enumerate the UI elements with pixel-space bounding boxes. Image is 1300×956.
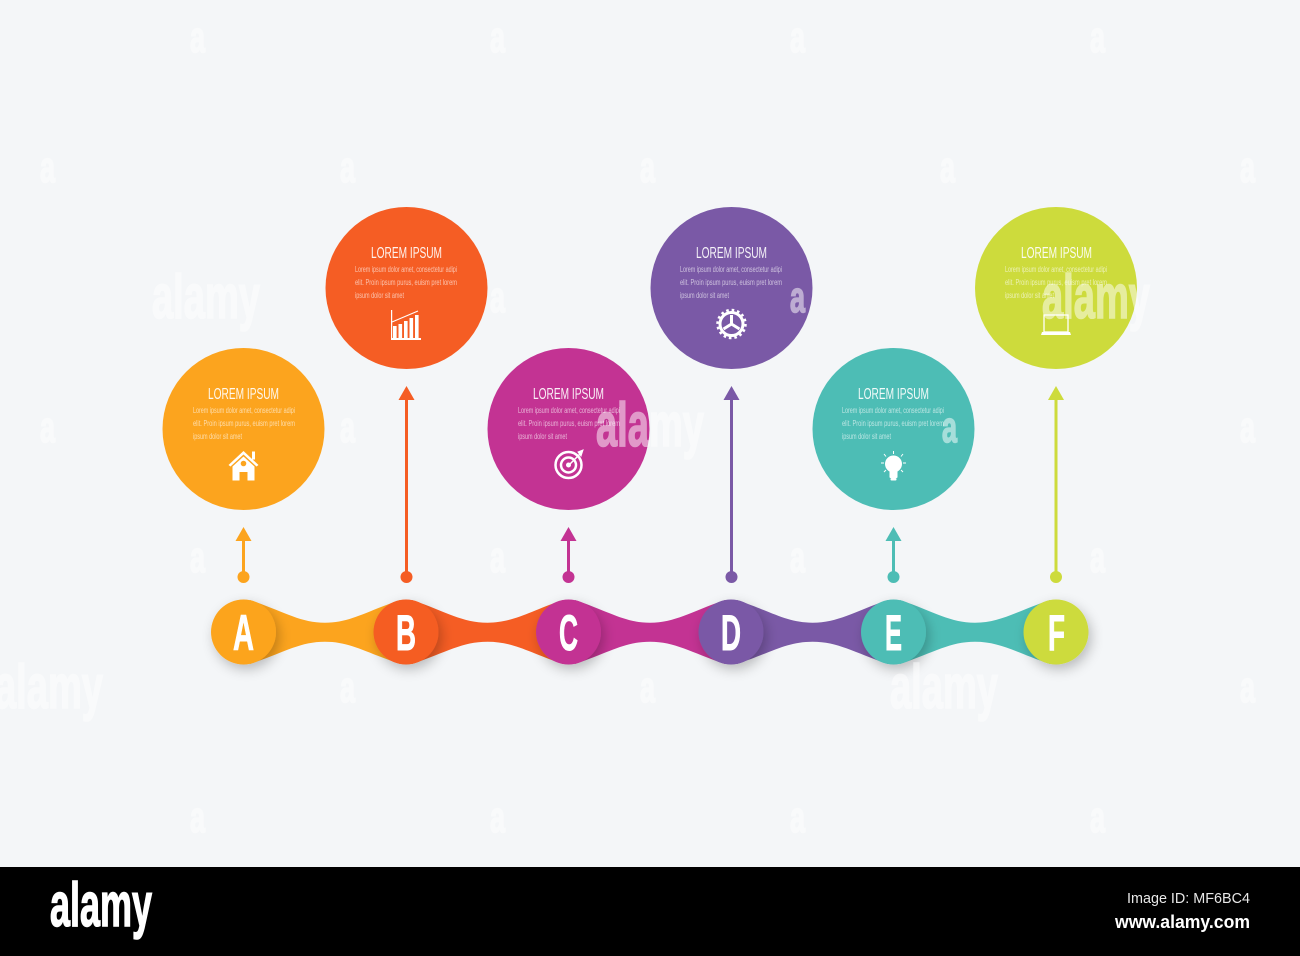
body text A: elit. Proin ipsum purus, euism pret lorem (193, 419, 295, 428)
node B: B (396, 605, 416, 661)
watermark: a (190, 13, 205, 62)
body text C (518, 406, 620, 441)
heading E: LOREM IPSUM (858, 386, 929, 403)
node C: C (559, 605, 578, 661)
body text A (193, 406, 295, 441)
node A (211, 600, 276, 664)
watermark: a (340, 403, 355, 452)
heading F: LOREM IPSUM (1021, 245, 1092, 262)
node B (374, 600, 438, 664)
watermark: a (640, 143, 655, 192)
heading C: LOREM IPSUM (533, 386, 604, 403)
arrow A (236, 527, 252, 583)
watermark: a (1090, 793, 1105, 842)
watermark: a (490, 13, 505, 62)
watermark: a (940, 143, 955, 192)
node D (698, 600, 764, 664)
heading A: LOREM IPSUM (208, 386, 279, 403)
watermark: a (640, 663, 655, 712)
body text D: Lorem ipsum dolor amet, consectetur adipi (680, 265, 782, 274)
panel: A orange (162, 348, 324, 510)
website: www.alamy.com (1114, 912, 1250, 932)
icon: house (228, 451, 258, 480)
panel: E teal (812, 348, 974, 510)
watermark: a (490, 533, 505, 582)
node A: A (233, 605, 254, 661)
body text C: Lorem ipsum dolor amet, consectetur adipi (518, 406, 620, 415)
heading B: LOREM IPSUM (371, 245, 442, 262)
watermark: a (490, 273, 505, 322)
watermark: a (190, 533, 205, 582)
body text F (1005, 265, 1107, 300)
node E: E (885, 605, 902, 661)
icon: bar chart (391, 310, 421, 340)
watermark: a (40, 143, 55, 192)
arrow B (398, 386, 414, 583)
body text F: ipsum dolor sit amet (1005, 291, 1055, 300)
panel: B red-orange (326, 207, 488, 369)
watermark: a (1240, 143, 1255, 192)
body text E: Lorem ipsum dolor amet, consectetur adipi (842, 406, 944, 415)
icon: laptop (1041, 315, 1071, 335)
body text F: elit. Proin ipsum purus, euism pret lorem (1005, 278, 1107, 287)
footer bar (0, 867, 1300, 956)
watermark: a (942, 403, 957, 452)
watermark: a (790, 793, 805, 842)
timeline connector band (250, 600, 1050, 664)
heading D: LOREM IPSUM (696, 245, 767, 262)
body text B: elit. Proin ipsum purus, euism pret lorem (355, 278, 457, 287)
node F: F (1048, 605, 1065, 661)
body text B (355, 265, 457, 300)
body text C: elit. Proin ipsum purus, euism pret lorem (518, 419, 620, 428)
body text E: ipsum dolor sit amet (842, 432, 892, 441)
watermark: a (340, 143, 355, 192)
watermark: alamy (0, 653, 103, 722)
body text F: Lorem ipsum dolor amet, consectetur adipi (1005, 265, 1107, 274)
watermark: a (40, 403, 55, 452)
body text A: ipsum dolor sit amet (193, 432, 243, 441)
image id: Image ID: MF6BC4 (1127, 890, 1250, 907)
watermark: a (790, 13, 805, 62)
watermark: alamy (890, 653, 998, 722)
body text A: Lorem ipsum dolor amet, consectetur adipi (193, 406, 295, 415)
arrow C (560, 527, 576, 583)
arrow E (886, 527, 902, 583)
body text C: ipsum dolor sit amet (518, 432, 568, 441)
node E (861, 600, 926, 664)
icon: light bulb (881, 451, 906, 480)
watermark: a (790, 273, 805, 322)
watermark: a (490, 793, 505, 842)
icon: gear (718, 310, 746, 338)
watermark: alamy (1042, 263, 1150, 332)
watermark: a (790, 533, 805, 582)
watermark: a (1090, 533, 1105, 582)
body text B: Lorem ipsum dolor amet, consectetur adipi (355, 265, 457, 274)
body text D: elit. Proin ipsum purus, euism pret lorem (680, 278, 782, 287)
arrow F (1048, 386, 1064, 583)
body text E (842, 406, 944, 441)
node C (536, 600, 601, 664)
watermark: a (1090, 13, 1105, 62)
panel: C magenta (488, 348, 650, 510)
body text D (680, 265, 782, 300)
node F (1024, 600, 1088, 664)
watermark: a (340, 663, 355, 712)
node D: D (721, 605, 741, 661)
arrow D (724, 386, 740, 583)
body text E: elit. Proin ipsum purus, euism pret lorem (842, 419, 944, 428)
body text B: ipsum dolor sit amet (355, 291, 405, 300)
watermark: alamy (152, 263, 260, 332)
watermark: alamy (596, 391, 704, 460)
watermark: a (1240, 403, 1255, 452)
panel: F lime (975, 207, 1137, 369)
body text D: ipsum dolor sit amet (680, 291, 730, 300)
panel: D purple (650, 207, 812, 369)
footer logo: alamy (50, 871, 152, 940)
icon: target (556, 450, 583, 478)
watermark: a (1240, 663, 1255, 712)
watermark: a (190, 793, 205, 842)
